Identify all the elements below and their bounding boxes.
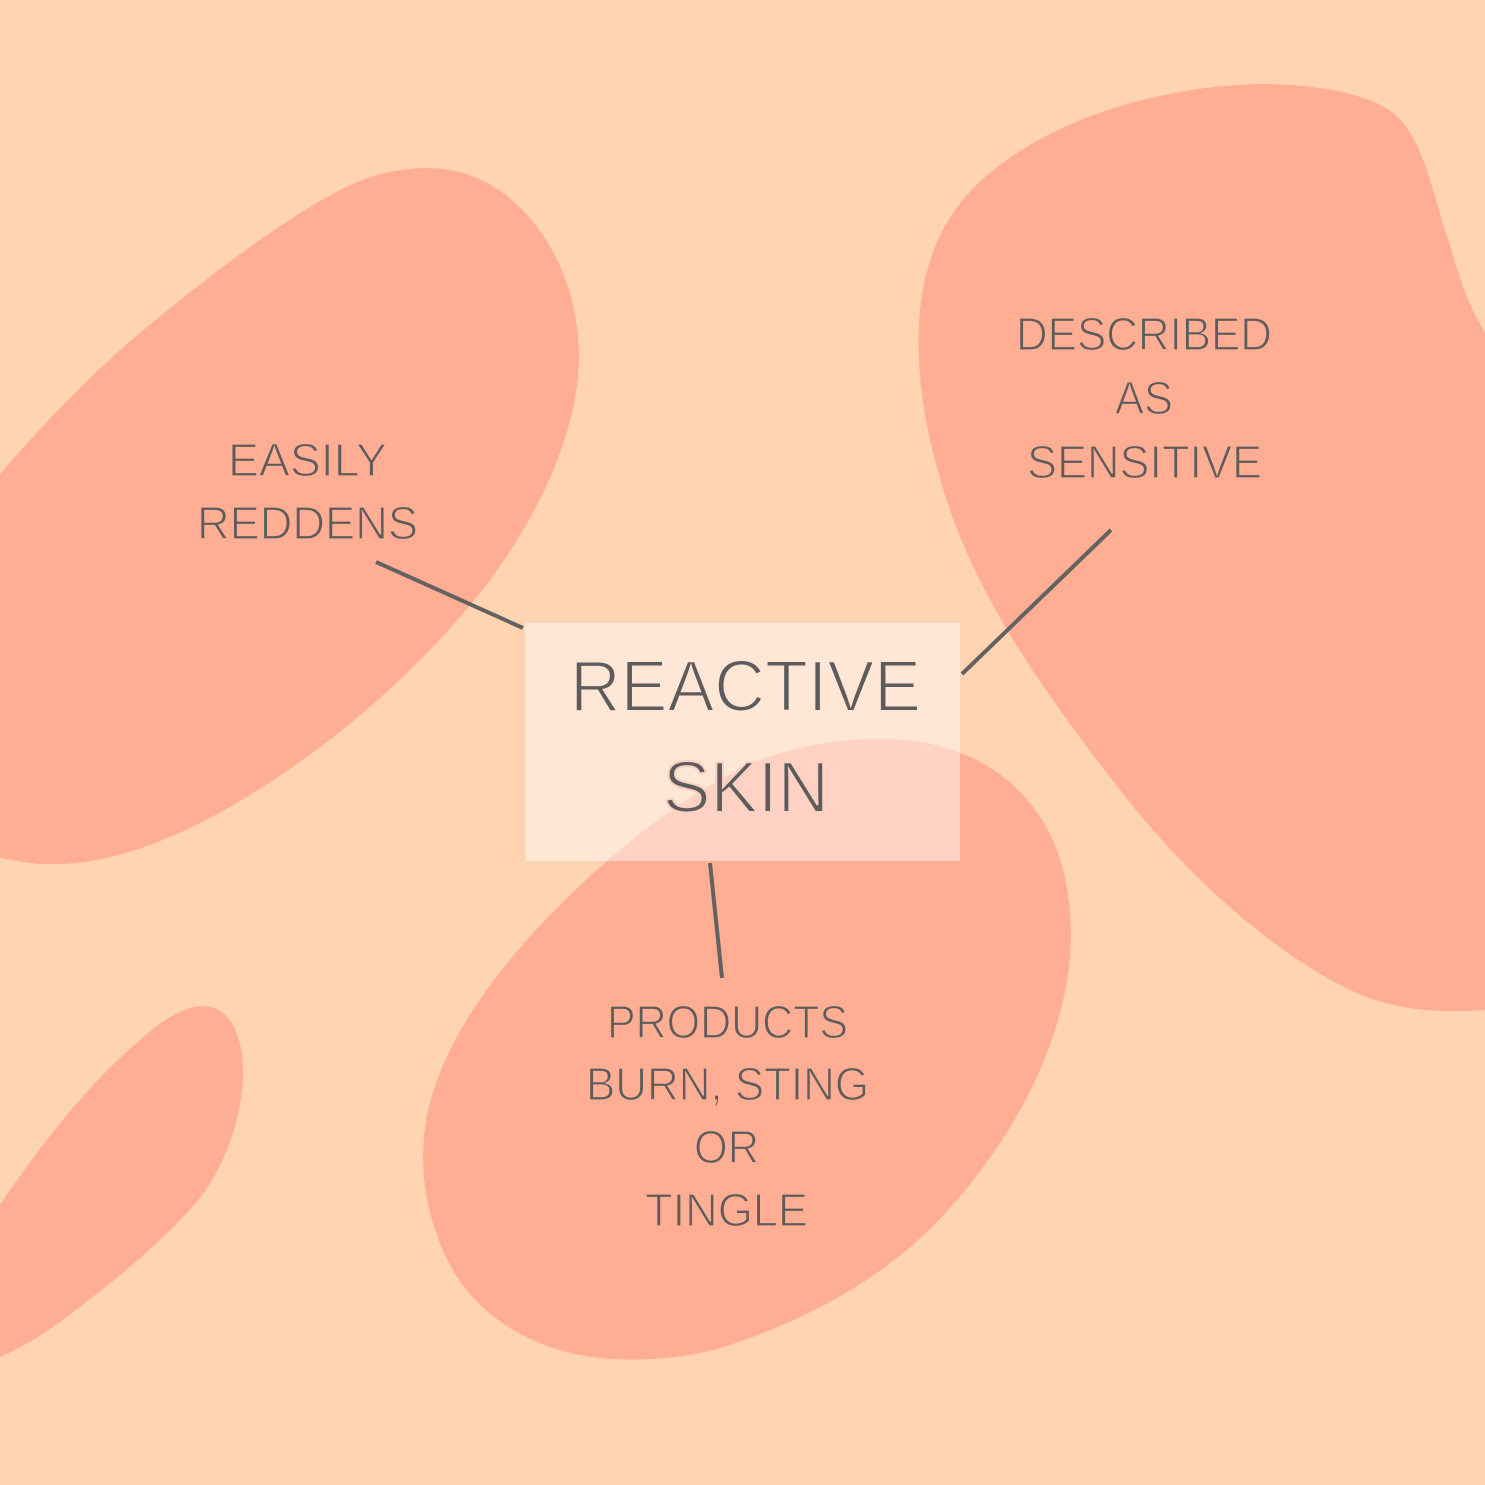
blob: left — [0, 168, 579, 864]
title: REACTIVE — [570, 647, 921, 727]
label: easily reddens — [197, 434, 418, 549]
blob: bottom left — [0, 1006, 243, 1357]
blob: right — [919, 84, 1485, 1011]
blob: bottom centre — [423, 739, 1071, 1360]
title — [570, 647, 921, 828]
arrow: to described as sensitive — [962, 530, 1111, 674]
label: described as sensitive — [1016, 308, 1272, 488]
label: easily reddens: EASILY — [228, 434, 387, 486]
label: described as sensitive: SENSITIVE — [1027, 436, 1262, 488]
title: SKIN — [663, 748, 829, 828]
label: easily reddens: REDDENS — [197, 497, 418, 549]
label: products burn, sting or tingle: OR — [694, 1121, 759, 1173]
arrow: to products burn — [710, 863, 722, 978]
arrow: to easily reddens — [376, 562, 523, 628]
label: products burn, sting or tingle: BURN, STING — [586, 1058, 869, 1110]
label: products burn, sting or tingle — [586, 996, 869, 1236]
label: described as sensitive: AS — [1115, 372, 1173, 424]
central title box — [525, 623, 960, 861]
label: products burn, sting or tingle: PRODUCTS — [607, 996, 848, 1048]
label: described as sensitive: DESCRIBED — [1016, 308, 1272, 360]
label: products burn, sting or tingle: TINGLE — [645, 1184, 808, 1236]
